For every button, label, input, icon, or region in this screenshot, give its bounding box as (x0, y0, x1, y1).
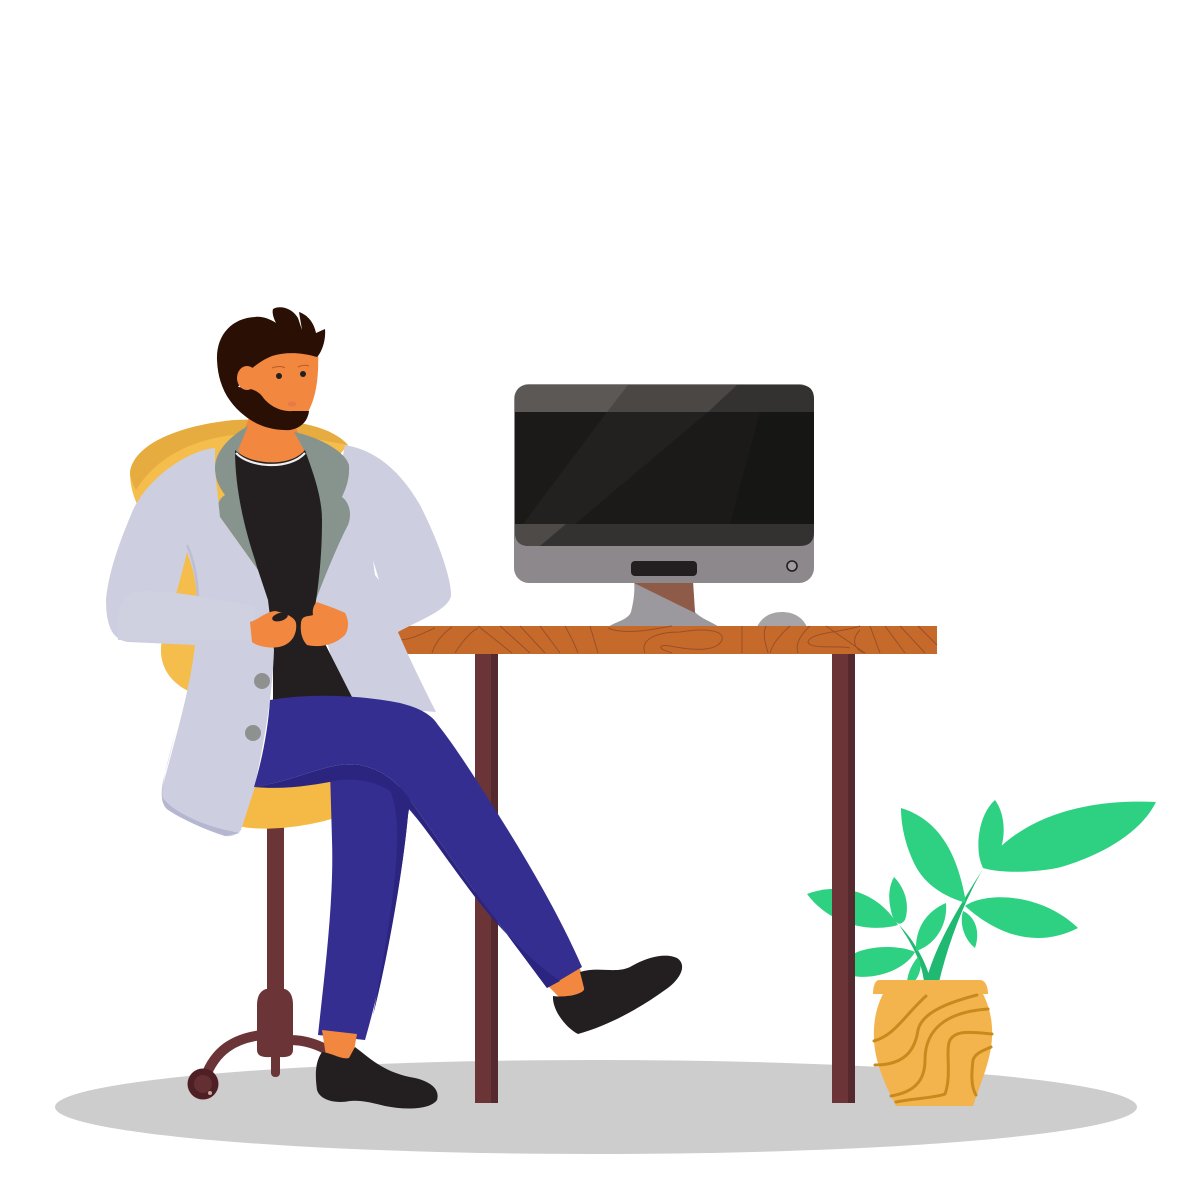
neck (236, 415, 306, 462)
monitor body (514, 384, 814, 583)
ear (237, 366, 257, 390)
table left leg (475, 650, 498, 1103)
left lapel (215, 426, 270, 570)
jacket buttons (245, 673, 270, 741)
monitor stand (608, 580, 719, 627)
tiny leaf above pot (907, 957, 921, 982)
raised foot sock (548, 968, 586, 998)
jacket lower edge shade (162, 730, 240, 836)
chair seat (236, 780, 335, 829)
middle right leaf (965, 897, 1078, 938)
right lapel (294, 432, 350, 605)
table right leg (832, 650, 855, 1103)
stems (926, 869, 983, 982)
jacket fold (187, 545, 198, 596)
fingers button (271, 611, 289, 623)
lower foot sock (322, 1030, 357, 1062)
low left leaf (853, 947, 915, 977)
caster wheel (188, 1068, 218, 1100)
screen (515, 385, 814, 546)
pot rim (873, 980, 988, 994)
leaning small leaf (916, 903, 946, 951)
left hand (250, 611, 296, 648)
chair hub (257, 989, 293, 1057)
face (243, 348, 318, 425)
pot body (874, 992, 992, 1106)
chair pole (267, 825, 284, 995)
small upright leaf (889, 877, 907, 924)
floor shadow (55, 1060, 1137, 1154)
table top (390, 626, 937, 654)
thigh shadow (254, 764, 560, 988)
eyes (276, 371, 306, 379)
hair and beard (217, 307, 325, 430)
pot (873, 980, 992, 1106)
pot wood pattern (874, 995, 992, 1102)
jacket back right (315, 445, 451, 712)
far left leaf (807, 889, 898, 928)
jacket right highlight (373, 560, 379, 580)
chair base arms (205, 1035, 262, 1078)
power button (787, 561, 797, 571)
mouse (757, 612, 807, 627)
brows (272, 365, 309, 368)
upper small leaf (978, 800, 1004, 868)
right hand (301, 602, 348, 646)
sleeve contour (118, 591, 255, 640)
man (106, 307, 682, 1108)
plant leaves (807, 800, 1156, 982)
jacket left front (106, 448, 274, 836)
upper thigh trousers (254, 696, 582, 988)
small lower leaf (962, 911, 977, 948)
lower shoe (316, 1047, 438, 1108)
nose (288, 402, 296, 406)
office chair (130, 420, 348, 1099)
head (217, 307, 325, 430)
shirt collar (236, 453, 305, 465)
webcam slot (631, 561, 697, 576)
raised shoe (553, 956, 682, 1034)
large right leaf (983, 802, 1156, 872)
lower leg trousers (318, 770, 412, 1040)
tall left leaf (901, 808, 966, 903)
chair stem (271, 1050, 280, 1077)
chair back (130, 420, 348, 700)
shirt (235, 450, 352, 702)
monitor (514, 384, 814, 627)
yellow gap under arm (176, 552, 197, 596)
